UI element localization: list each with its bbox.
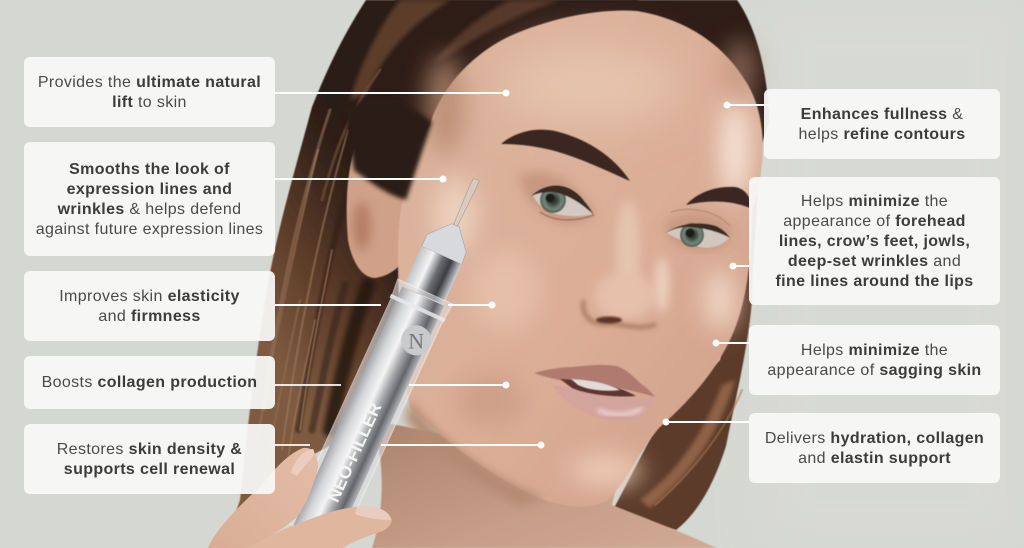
callout: fullness and contours: Enhances fullness & xyxy=(801,106,963,122)
applicator tip xyxy=(451,177,480,229)
lips xyxy=(534,365,655,421)
callout: ultimate natural lift: Provides the ultimate natural xyxy=(38,74,261,90)
callout: sagging skin: Helps minimize the xyxy=(801,342,948,358)
callout: fullness and contours: helps refine contours xyxy=(799,126,965,142)
index finger xyxy=(208,448,318,548)
callout: expression lines and wrinkles: wrinkles & helps defend xyxy=(58,200,241,218)
callout: skin elasticity xyxy=(24,271,275,341)
callout: skin elasticity: and firmness xyxy=(98,308,201,324)
callout: ultimate natural lift: lift to skin xyxy=(112,94,187,110)
right eyebrow xyxy=(686,187,750,208)
callout: skin elasticity: Improves skin elasticity xyxy=(59,288,240,304)
face xyxy=(345,10,763,507)
chrome collar xyxy=(403,246,462,305)
callout: forehead lines and wrinkles: fine lines around the lips xyxy=(775,272,974,290)
nose xyxy=(583,200,669,327)
hand xyxy=(208,448,392,548)
neck and shoulder xyxy=(372,420,716,548)
clear outer sleeve xyxy=(287,279,452,547)
callout: skin density: supports cell renewal xyxy=(64,460,235,478)
fingernail xyxy=(291,449,314,476)
callout: skin density xyxy=(24,424,275,494)
callout: hydration support xyxy=(749,413,1000,483)
callout: skin density: Restores skin density & xyxy=(57,440,242,458)
callout: expression lines and wrinkles: expression lines and xyxy=(67,180,232,198)
left eye xyxy=(518,172,596,224)
callout: forehead lines and wrinkles: lines, crow’s feet, jowls, xyxy=(779,232,970,250)
facial shading xyxy=(405,40,756,506)
callout: ultimate natural lift xyxy=(24,57,275,127)
product pen xyxy=(287,166,504,547)
callout: expression lines and wrinkles: against future expression lines xyxy=(36,220,263,238)
logo badge xyxy=(396,321,436,360)
right eye xyxy=(664,209,732,251)
collar ring xyxy=(390,294,446,322)
metal cap xyxy=(422,216,475,264)
callout: hydration support: Delivers hydration, collagen xyxy=(765,430,984,446)
product name: NEO-FILLER xyxy=(324,400,385,505)
callout: forehead lines and wrinkles: deep-set wrinkles and xyxy=(788,252,961,270)
callout: hydration support: and elastin support xyxy=(798,450,951,466)
callout: expression lines and wrinkles xyxy=(24,142,275,256)
silver barrel xyxy=(294,287,444,544)
hair xyxy=(235,0,769,530)
callout: sagging skin: appearance of sagging skin xyxy=(767,362,982,378)
callout: forehead lines and wrinkles xyxy=(749,177,1000,305)
callout: expression lines and wrinkles: Smooths the look of xyxy=(69,160,230,178)
callout lines and dots xyxy=(275,90,770,448)
thumb xyxy=(247,506,392,548)
callout: collagen production: Boosts collagen production xyxy=(42,374,257,391)
hair strands xyxy=(258,70,742,505)
callout: forehead lines and wrinkles: Helps minimize the xyxy=(801,192,948,210)
thumbnail xyxy=(355,506,391,520)
hair over temple xyxy=(345,99,432,200)
callout: forehead lines and wrinkles: appearance of forehead xyxy=(783,212,966,230)
callout: fullness and contours xyxy=(764,89,1000,159)
logo badge: N xyxy=(408,328,424,353)
ear xyxy=(347,140,420,278)
callout: sagging skin xyxy=(749,325,1000,395)
left eyebrow xyxy=(501,130,630,181)
callout: collagen production xyxy=(24,356,275,409)
